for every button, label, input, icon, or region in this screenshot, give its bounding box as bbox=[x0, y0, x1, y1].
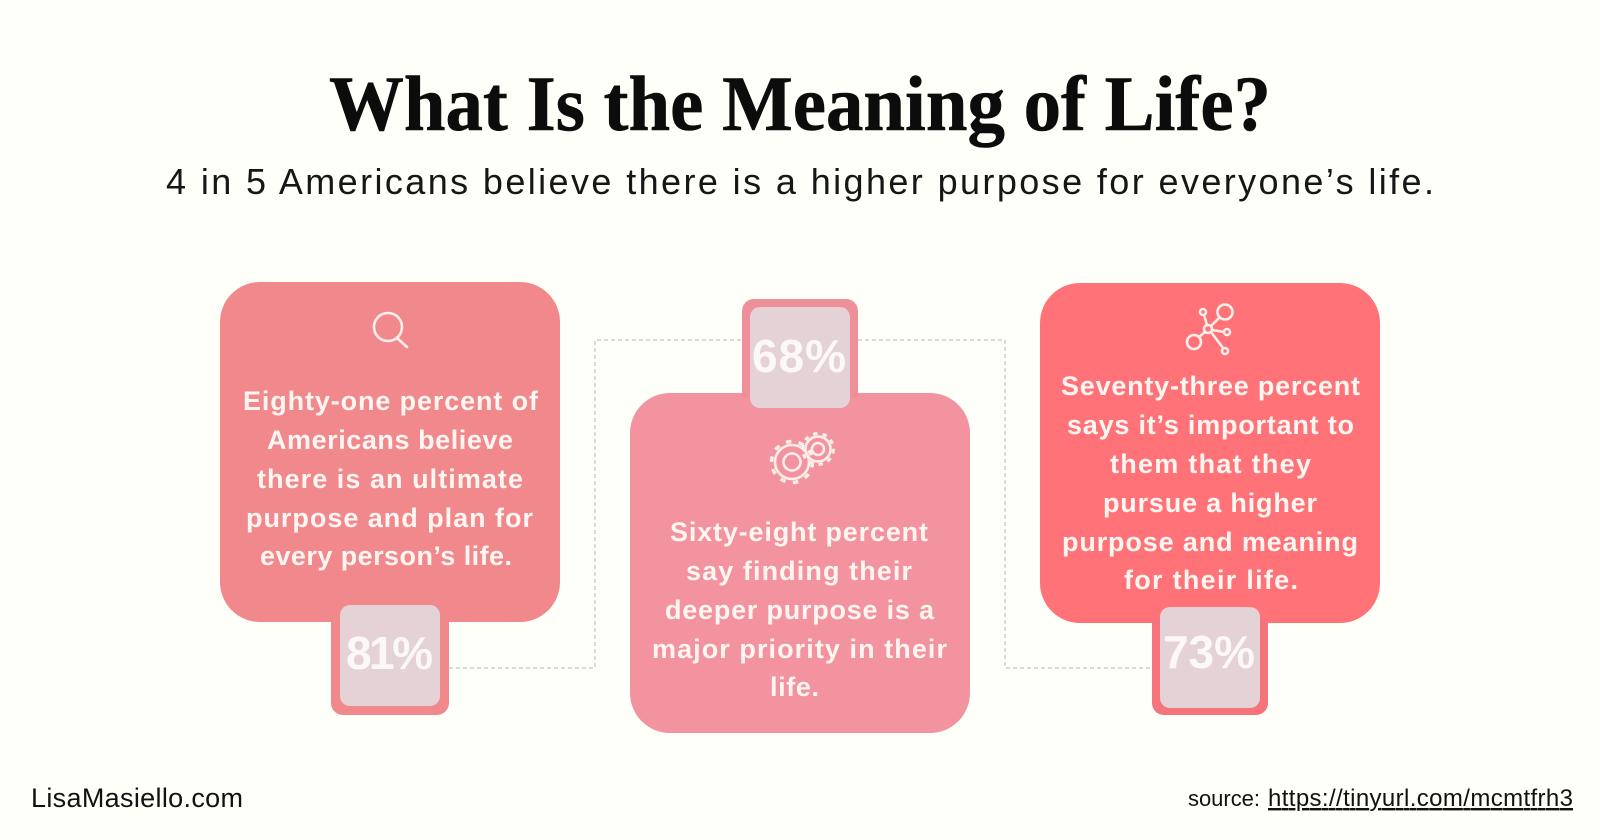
body text right: says it’s important to bbox=[1067, 410, 1354, 440]
body text center: major priority in their bbox=[652, 634, 947, 664]
body text left bbox=[243, 386, 539, 571]
body text right: Seventy-three percent bbox=[1061, 371, 1360, 401]
body text left: Americans believe bbox=[267, 425, 513, 455]
badge tab 73 bbox=[1152, 620, 1268, 715]
body text right: pursue a higher bbox=[1103, 488, 1317, 518]
panel: 73 percent bbox=[1040, 283, 1380, 715]
stat 68%: 68% bbox=[752, 330, 846, 382]
footer: source: source: bbox=[1188, 786, 1260, 811]
badge inner 81 bbox=[340, 605, 440, 706]
body text center: life. bbox=[770, 672, 819, 702]
body text right: them that they bbox=[1110, 449, 1311, 479]
dashed connector: 81% to 68% bbox=[449, 340, 742, 668]
body text center: say finding their bbox=[686, 556, 912, 586]
body text left: there is an ultimate bbox=[257, 464, 523, 494]
body text right: for their life. bbox=[1124, 565, 1298, 595]
body text center: deeper purpose is a bbox=[665, 595, 935, 625]
body text left: Eighty-one percent of bbox=[243, 386, 539, 416]
panel: 81 percent bbox=[220, 282, 560, 715]
stat 73%: 73% bbox=[1163, 626, 1255, 678]
body text left: every person’s life. bbox=[260, 541, 512, 571]
dashed connector: 68% to 73% bbox=[858, 340, 1152, 668]
title: What Is the Meaning of Life? bbox=[329, 60, 1271, 147]
badge inner 73 bbox=[1160, 607, 1260, 708]
body text center: Sixty-eight percent bbox=[670, 517, 928, 547]
footer: source: https://tinyurl.com/mcmtfrh3 bbox=[1268, 785, 1573, 812]
badge tab 81 bbox=[331, 590, 449, 715]
icon: network bbox=[1187, 304, 1232, 354]
badge tab 68 bbox=[742, 299, 858, 398]
stat 81%: 81% bbox=[346, 627, 433, 679]
badge inner 68 bbox=[750, 307, 850, 408]
panel: 68 percent bbox=[630, 299, 970, 733]
icon: gears bbox=[772, 434, 834, 482]
card background center bbox=[630, 393, 970, 733]
icon: magnifier bbox=[374, 313, 407, 347]
body text left: purpose and plan for bbox=[246, 503, 533, 533]
card background left bbox=[220, 282, 560, 622]
card background right bbox=[1040, 283, 1380, 623]
body text center bbox=[652, 517, 947, 702]
footer: site name: LisaMasiello.com bbox=[31, 783, 243, 813]
subtitle: 4 in 5 Americans believe there is a higher purpose for everyone’s life. bbox=[166, 161, 1434, 202]
body text right: purpose and meaning bbox=[1062, 527, 1358, 557]
body text right bbox=[1061, 371, 1360, 595]
